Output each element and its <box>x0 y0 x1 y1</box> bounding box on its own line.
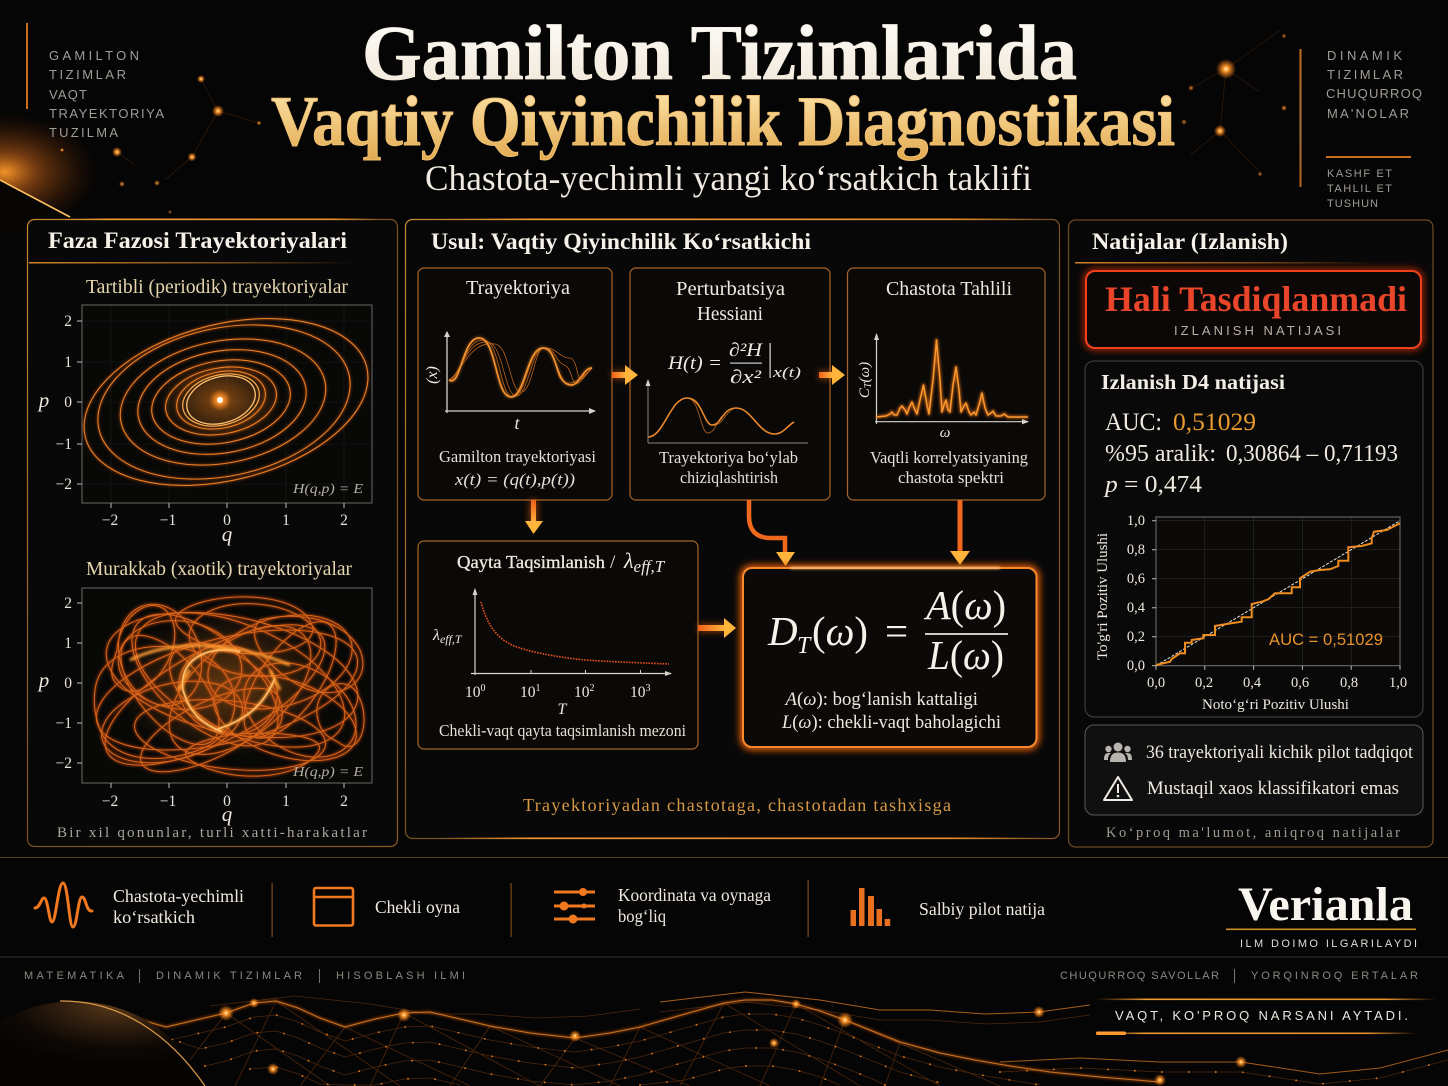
panel caption: Bir xil qonunlar, turli xatti-harakatlar <box>57 825 367 841</box>
title block <box>271 9 1175 198</box>
footer keywords right: YORQINROQ ERTALAR <box>1251 970 1418 982</box>
top-left keywords <box>26 23 164 140</box>
card: D4 result: Izlanish D4 natijasi <box>1101 370 1285 394</box>
top-left keywords: TUZILMA <box>49 125 118 140</box>
footer motto <box>1096 998 1436 1035</box>
panel heading: phase space: Faza Fazosi Trayektoriyalari <box>48 228 348 253</box>
step box: redistribution: λ <box>624 548 634 573</box>
feature: finite window <box>314 888 460 926</box>
footer keywords left: MATEMATIKA <box>24 970 125 982</box>
icon: window <box>314 888 353 926</box>
top-right keywords: DINAMIK <box>1327 48 1402 63</box>
top-left keywords: VAQT <box>49 87 87 102</box>
step box: redistribution: 1 <box>536 683 540 694</box>
chart: ROC curve: 0,2 <box>1127 629 1145 645</box>
chart: ROC curve: 0,0 <box>1147 675 1165 691</box>
stars top-right constellation <box>1181 30 1287 176</box>
feature: frequency-resolved indicator: Chastota-yechimli <box>113 886 244 906</box>
chart: regular phase portrait: 2 <box>340 512 348 529</box>
top-right keywords: TIZIMLAR <box>1327 67 1403 82</box>
title block: Chastota-yechimli yangi ko‘rsatkich taklifi <box>425 158 1032 198</box>
step box: trajectory <box>418 268 612 500</box>
chart: ROC curve: 0,8 <box>1127 542 1145 558</box>
step box: redistribution: eff,T <box>634 557 666 576</box>
chart: ROC curve: 0,6 <box>1127 571 1145 587</box>
mesh terrain background <box>120 992 1448 1086</box>
feature: frequency-resolved indicator: ko‘rsatkich <box>113 907 195 927</box>
chart: ROC curve: 1,0 <box>1127 513 1145 529</box>
chart: regular phase portrait: −1 <box>160 512 176 529</box>
top-right keywords: TUSHUN <box>1327 198 1378 210</box>
step box: redistribution: λ <box>433 627 440 644</box>
chart: chaotic phase portrait: 2 <box>64 595 72 612</box>
top-left keywords: TRAYEKTORIYA <box>49 106 164 121</box>
chart: chaotic phase portrait: 1 <box>64 635 72 652</box>
card: D4 result: AUC: <box>1105 409 1162 436</box>
step box: perturbation Hessian: Hessiani <box>697 304 764 325</box>
step box: redistribution: Chekli-vaqt qayta taqsimlanish mezoni <box>439 721 686 740</box>
formula box: L(ω): chekli-vaqt baholagichi <box>781 712 1001 733</box>
footer keywords left: DINAMIK TIZIMLAR <box>156 970 302 982</box>
step box: trajectory: x(t) = (q(t),p(t)) <box>454 470 575 489</box>
chart: ROC curve: 0,8 <box>1340 675 1358 691</box>
chart: chaotic phase portrait <box>37 585 373 826</box>
chart: regular phase portrait: p <box>37 388 49 412</box>
feature: negative pilot result <box>850 888 1045 926</box>
footer motto: VAQT, KO'PROQ NARSANI AYTADI. <box>1115 1008 1408 1023</box>
arrow: Hessian to frequency <box>819 365 845 385</box>
step box: frequency analysis: C <box>857 388 873 398</box>
step box: redistribution: 10 <box>630 684 646 701</box>
subheading: chaotic trajectories: Murakkab (xaotik) trayektoriyalar <box>86 558 352 580</box>
footer divider top <box>0 857 1448 858</box>
corner glow and planet limb, top-left <box>0 114 97 232</box>
chart: ROC curve: To'g'ri Pozitiv Ulushi <box>1095 533 1111 660</box>
icon: warning triangle <box>1104 777 1132 800</box>
step box: frequency analysis: Vaqtli korrelyatsiyaning <box>870 448 1028 467</box>
panel caption: results: Ko‘proq ma'lumot, aniqroq natijalar <box>1106 825 1400 841</box>
planet, bottom-left <box>0 1001 205 1086</box>
step box: redistribution: / <box>610 552 616 573</box>
card: pilot notes <box>1085 725 1423 815</box>
chart: ROC curve <box>1095 513 1407 713</box>
step box: redistribution: 2 <box>590 683 594 694</box>
chart: chaotic phase portrait: −2 <box>102 793 118 810</box>
step box: redistribution: Qayta Taqsimlanish <box>457 552 605 572</box>
step box: trajectory: Gamilton trayektoriyasi <box>439 447 596 466</box>
panel: results <box>1068 220 1433 847</box>
chart: regular phase portrait: 2 <box>64 313 72 330</box>
step box: redistribution: 3 <box>646 683 650 694</box>
chart: chaotic phase portrait: 1 <box>282 793 290 810</box>
card: D4 result: 0,51029 <box>1173 409 1256 436</box>
formula box: A(ω): bog‘lanish kattaligi <box>784 689 978 710</box>
brand: Verianla: ILM DOIMO ILGARILAYDI <box>1240 938 1417 950</box>
chart: regular phase portrait <box>37 291 386 546</box>
chart: regular phase portrait: H(q,p) = E <box>292 482 364 497</box>
top-right keywords: MA'NOLAR <box>1327 106 1409 121</box>
top-left keywords: GAMILTON <box>49 48 139 63</box>
feature: finite window: Chekli oyna <box>375 897 460 917</box>
formula box: (ω) <box>812 608 868 654</box>
chart: chaotic phase portrait: q <box>222 802 233 826</box>
feature: coordinate and window dependent: bog‘liq <box>618 906 666 926</box>
formula box: = <box>885 608 908 654</box>
chart: ROC curve: 0,4 <box>1243 675 1262 691</box>
chart: regular phase portrait: −1 <box>56 436 72 453</box>
subheading: regular trajectories: Tartibli (periodik) trayektoriyalar <box>86 276 348 298</box>
step box: trajectory: t <box>514 413 520 433</box>
chart: regular phase portrait: 0 <box>223 512 231 529</box>
chart: regular phase portrait: q <box>222 522 233 546</box>
step box: redistribution: 10 <box>520 684 536 701</box>
top-right keywords <box>1300 48 1422 210</box>
card: D4 result: p = 0,474 <box>1103 472 1202 498</box>
title block: Gamilton Tizimlarida <box>362 9 1077 96</box>
top-left keywords: TIZIMLAR <box>49 67 126 82</box>
step box: perturbation Hessian: Trayektoriya bo‘ylab <box>659 448 798 467</box>
feature: coordinate and window dependent <box>554 885 771 926</box>
step box: frequency analysis: chastota spektri <box>898 468 1004 487</box>
footer keywords right: CHUQURROQ SAVOLLAR <box>1060 970 1219 982</box>
status badge: not confirmed: IZLANISH NATIJASI <box>1174 323 1341 338</box>
feature: coordinate and window dependent: Koordinata va oynaga <box>618 885 771 905</box>
step box: perturbation Hessian: ∂²H <box>729 340 763 361</box>
brand: Verianla <box>1226 878 1417 950</box>
status badge: not confirmed: Hali Tasdiqlanmadi <box>1105 279 1407 319</box>
step box: frequency analysis: T <box>863 381 874 388</box>
icon: wave <box>35 883 92 927</box>
chart: chaotic phase portrait: −1 <box>160 793 176 810</box>
step box: perturbation Hessian: Perturbatsiya <box>676 279 785 300</box>
chart: regular phase portrait: −2 <box>102 512 118 529</box>
step box: frequency analysis: (ω) <box>857 362 873 383</box>
panel: method <box>406 218 1060 839</box>
icon: sliders <box>554 888 595 924</box>
card: D4 result <box>1085 361 1423 717</box>
top-right keywords: TAHLIL ET <box>1327 183 1392 195</box>
step box: redistribution: 0 <box>480 683 486 694</box>
arrow: Hessian down to formula <box>749 500 795 566</box>
step box: perturbation Hessian <box>630 268 830 500</box>
step box: frequency analysis: Chastota Tahlili <box>886 279 1013 300</box>
chart: ROC curve: Noto‘g‘ri Pozitiv Ulushi <box>1202 697 1349 713</box>
step box: redistribution: eff,T <box>440 632 463 646</box>
chart: ROC curve: 0,6 <box>1291 675 1309 691</box>
mesh glowing nodes <box>218 998 1247 1086</box>
chart: chaotic phase portrait: 2 <box>340 793 348 810</box>
chart: ROC curve: 0,0 <box>1127 658 1145 674</box>
formula box: A(ω) <box>923 582 1006 628</box>
formula box: L(ω) <box>927 632 1004 678</box>
formula box: D <box>767 608 798 654</box>
card: pilot notes: 36 trayektoriyali kichik pilot tadqiqot <box>1146 742 1414 763</box>
chart: chaotic phase portrait: −1 <box>56 715 72 732</box>
chart: regular phase portrait: −2 <box>56 476 72 493</box>
chart: regular phase portrait: 1 <box>282 512 290 529</box>
card: D4 result: %95 aralik: <box>1105 441 1216 467</box>
step box: frequency analysis: ω <box>940 425 950 441</box>
step box: redistribution: 10 <box>465 684 480 701</box>
chart: ROC curve: 1,0 <box>1389 675 1407 691</box>
method tagline: Trayektoriyadan chastotaga, chastotadan tashxisga <box>523 795 951 815</box>
footer keywords left: HISOBLASH ILMI <box>336 970 465 982</box>
card: D4 result: 0,30864 – 0,71193 <box>1226 441 1398 467</box>
panel heading: results: Natijalar (Izlanish) <box>1092 229 1288 254</box>
top-right keywords: KASHF ET <box>1327 168 1392 180</box>
step box: redistribution: T <box>558 701 568 718</box>
card: pilot notes: Mustaqil xaos klassifikatori emas <box>1147 778 1399 799</box>
formula box: T <box>797 633 812 659</box>
formula box <box>743 567 1036 747</box>
chart: ROC curve: 0,2 <box>1195 675 1213 691</box>
panel: phase space trajectories <box>28 218 398 846</box>
chart: chaotic phase portrait: 0 <box>64 675 72 692</box>
feature: negative pilot result: Salbiy pilot natija <box>919 899 1045 919</box>
panel heading: method: Usul: Vaqtiy Qiyinchilik Ko‘rsatkichi <box>431 229 812 254</box>
chart: ROC curve: 0,4 <box>1127 600 1146 616</box>
chart: ROC curve: AUC = 0,51029 <box>1269 630 1383 649</box>
feature: frequency-resolved indicator <box>35 883 244 927</box>
stars top-left constellation <box>60 75 262 214</box>
top-right keywords: CHUQURROQ <box>1326 86 1422 101</box>
step box: trajectory: Trayektoriya <box>466 278 570 299</box>
chart: regular phase portrait: 1 <box>64 354 72 371</box>
icon: people <box>1104 742 1132 762</box>
step box: redistribution <box>418 541 698 749</box>
arrow: redistribution to formula <box>698 618 736 638</box>
chart: regular phase portrait: 0 <box>64 394 72 411</box>
chart: chaotic phase portrait: H(q,p) = E <box>292 765 364 780</box>
chart: chaotic phase portrait: 0 <box>223 793 231 810</box>
footer keywords right <box>1060 969 1418 983</box>
step box: redistribution: 10 <box>574 684 590 701</box>
brand: Verianla: Verianla <box>1238 878 1413 931</box>
title block: Vaqtiy Qiyinchilik Diagnostikasi <box>271 83 1175 161</box>
step box: perturbation Hessian: chiziqlashtirish <box>680 468 779 487</box>
chart: chaotic phase portrait: p <box>37 668 49 692</box>
chart: chaotic phase portrait: −2 <box>56 755 72 772</box>
step box: frequency analysis <box>848 268 1045 500</box>
step box: perturbation Hessian: x(t) <box>772 365 801 381</box>
step box: perturbation Hessian: H(t) = <box>667 353 722 374</box>
step box: perturbation Hessian: ∂x² <box>730 367 761 388</box>
arrow: trajectory to Hessian <box>612 365 638 385</box>
arrow: frequency down to formula <box>950 500 970 565</box>
step box: trajectory: (x) <box>424 366 441 384</box>
icon: bar chart <box>850 888 890 926</box>
arrow: trajectory down to redistribution <box>525 500 543 534</box>
footer keywords left <box>24 969 465 983</box>
status badge: not confirmed <box>1086 271 1421 348</box>
